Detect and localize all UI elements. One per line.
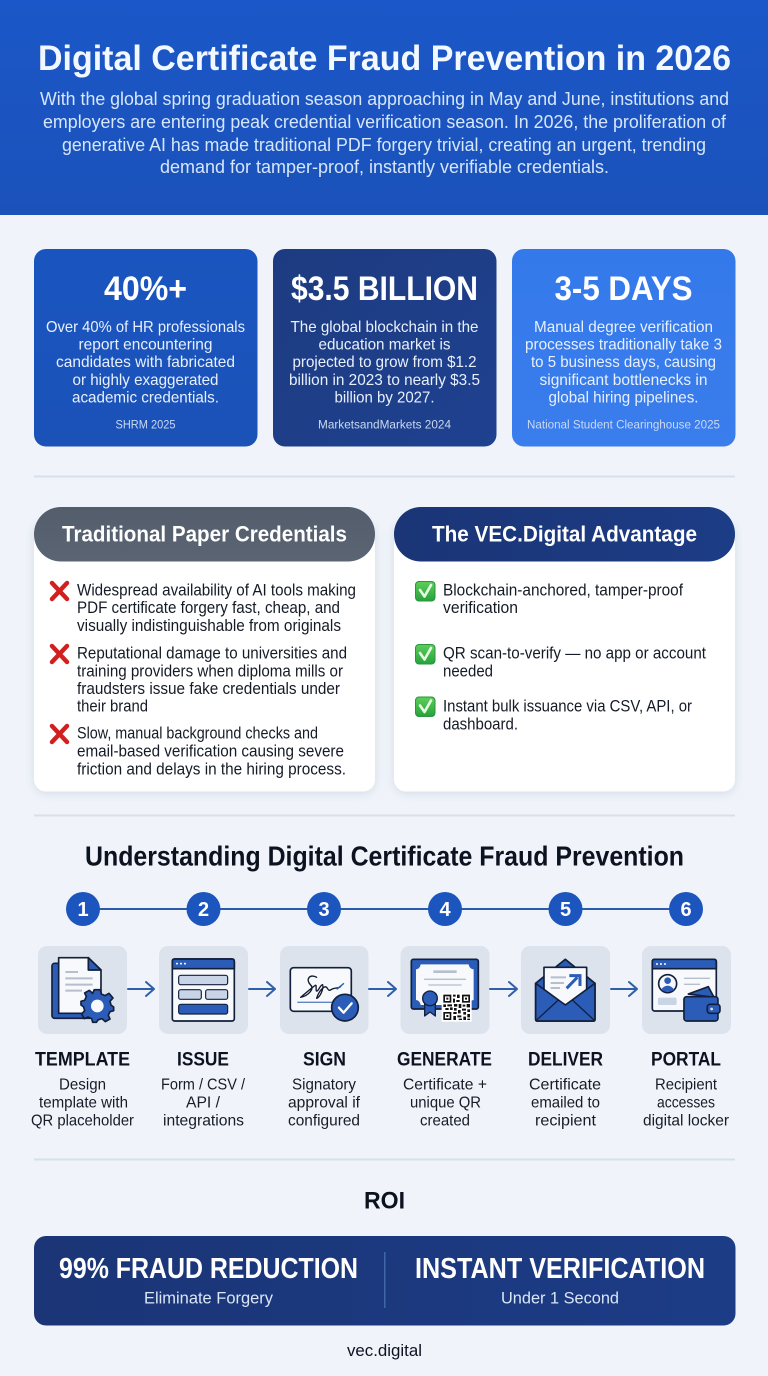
drawback 2: their brand	[77, 698, 148, 716]
stat card: $3.5 billion: $3.5 BILLION	[291, 270, 478, 308]
step label: template	[31, 1048, 134, 1130]
stat card: 40%+: 40%+	[104, 270, 187, 308]
drawback 1: PDF certificate forgery fast, cheap, and	[77, 599, 340, 617]
step label: deliver: DELIVER	[528, 1048, 603, 1070]
step label: template: Design	[59, 1076, 106, 1094]
stat card: $3.5 billion: projected to grow from $1.2	[292, 354, 476, 371]
drawback 2: fraudsters issue fake credentials under	[77, 680, 341, 698]
intro paragraph: demand for tamper-proof, instantly verifiable credentials.	[160, 156, 609, 177]
step label: deliver	[528, 1048, 603, 1130]
step label: sign: Signatory	[292, 1076, 356, 1094]
drawback 3: friction and delays in the hiring process.	[77, 760, 346, 778]
step label: sign: approval if	[288, 1094, 361, 1112]
step number 6: 6	[680, 899, 692, 921]
step label: portal	[643, 1048, 729, 1130]
ROI banner	[34, 1236, 736, 1326]
panel heading: Traditional Paper Credentials	[62, 522, 347, 546]
header banner	[0, 0, 768, 215]
step label: sign	[288, 1048, 361, 1130]
footer URL: vec.digital	[347, 1341, 422, 1360]
step label: portal: accesses	[657, 1094, 715, 1112]
drawback 3: email-based verification causing severe	[77, 742, 344, 760]
step label: portal: digital locker	[643, 1112, 729, 1130]
step label: deliver: recipient	[535, 1112, 597, 1130]
panel heading	[394, 507, 735, 562]
step number 2: 2	[198, 899, 209, 921]
stat card: 3-5 days: Manual degree verification	[534, 319, 713, 336]
icon: green check 3	[416, 697, 435, 716]
stat card: $3.5 billion	[273, 249, 496, 446]
drawback 1	[77, 582, 356, 635]
step number 3	[307, 892, 341, 926]
stat card: 3-5 days: to 5 business days, causing	[531, 354, 716, 371]
title: Digital Certificate Fraud Prevention in 2026	[38, 39, 731, 78]
step label: generate: created	[420, 1112, 470, 1130]
step label: template: QR placeholder	[31, 1112, 134, 1130]
panel: the VEC.Digital advantage	[394, 507, 735, 792]
step label: sign: configured	[288, 1112, 360, 1130]
panel heading: The VEC.Digital Advantage	[432, 522, 697, 546]
step label: generate: Certificate +	[403, 1076, 487, 1094]
step number 1	[66, 892, 100, 926]
step label: portal: PORTAL	[651, 1048, 721, 1070]
icon: envelope delivery	[521, 946, 610, 1034]
icon: green check 2	[416, 644, 435, 664]
benefit 1: verification	[443, 599, 518, 617]
step label: deliver: emailed to	[531, 1094, 600, 1112]
icon: template document with gear	[38, 946, 127, 1034]
benefit 2: QR scan-to-verify — no app or account	[443, 644, 706, 662]
stat card: $3.5 billion: billion by 2027.	[334, 390, 434, 406]
arrow 4 to 5	[490, 982, 517, 996]
drawback 2: training providers when diploma mills or	[77, 662, 344, 680]
panel heading	[34, 507, 375, 562]
stat card: 40%+: candidates with fabricated	[56, 354, 235, 371]
step label: template: template with	[39, 1094, 128, 1112]
intro paragraph: generative AI has made traditional PDF forgery trivial, creating an urgent, trending	[62, 134, 706, 155]
benefit 3: Instant bulk issuance via CSV, API, or	[443, 698, 693, 716]
stat card: $3.5 billion: The global blockchain in the	[290, 319, 479, 336]
arrow 2 to 3	[249, 982, 275, 996]
panel: traditional paper credentials	[34, 507, 375, 792]
timeline numbers	[66, 892, 703, 926]
icon: green check 1	[416, 582, 435, 601]
drawback 1: Widespread availability of AI tools making	[77, 582, 356, 600]
benefit 2	[443, 644, 706, 680]
step number 4	[428, 892, 462, 926]
drawback 2	[77, 644, 347, 716]
intro paragraph	[40, 88, 729, 177]
section heading: ROI: ROI	[364, 1188, 405, 1214]
step label: generate	[397, 1048, 492, 1130]
metric: fraud reduction	[59, 1253, 358, 1308]
metric: fraud reduction: Eliminate Forgery	[144, 1288, 273, 1308]
metric: instant verification: INSTANT VERIFICATION	[415, 1253, 705, 1285]
metric: instant verification	[415, 1253, 705, 1308]
step number 5	[548, 892, 582, 926]
section heading: understanding: Understanding Digital Certificate Fraud Prevention	[85, 840, 684, 872]
drawback 2: Reputational damage to universities and	[77, 644, 347, 662]
stat card: 40%+: SHRM 2025	[116, 418, 176, 432]
benefit 3: dashboard.	[443, 716, 518, 734]
icon: issue form window	[159, 946, 248, 1034]
stat card: 40%+	[34, 249, 258, 446]
intro paragraph: With the global spring graduation season approaching in May and June, institutions and	[40, 88, 729, 109]
benefit 1	[443, 582, 683, 617]
stat card: $3.5 billion: MarketsandMarkets 2024	[318, 418, 451, 432]
stat card: 40%+: or highly exaggerated	[72, 372, 218, 389]
arrow 3 to 4	[369, 982, 396, 996]
intro paragraph: employers are entering peak credential verification season. In 2026, the proliferation of	[43, 111, 727, 132]
drawback 3: Slow, manual background checks and	[77, 724, 318, 742]
stat card: 3-5 days: 3-5 DAYS	[554, 270, 692, 308]
arrow 5 to 6	[611, 982, 637, 996]
benefit 1: Blockchain-anchored, tamper-proof	[443, 582, 683, 600]
stat card: 3-5 days: processes traditionally take 3	[525, 336, 722, 354]
step label: generate: unique QR	[410, 1094, 481, 1112]
step label: issue: Form / CSV /	[161, 1076, 246, 1094]
icon: red cross 3	[52, 726, 67, 742]
stat card: 40%+: academic credentials.	[72, 390, 219, 406]
step label: issue: integrations	[163, 1112, 244, 1130]
stat card: $3.5 billion: education market is	[318, 336, 451, 354]
icon: certificate with QR code	[400, 946, 490, 1034]
step label: sign: SIGN	[303, 1048, 346, 1070]
icon: red cross 1	[52, 583, 67, 599]
benefit 3	[443, 698, 693, 734]
stat card: 3-5 days: National Student Clearinghouse 2025	[527, 418, 720, 432]
stat card: 3-5 days: significant bottlenecks in	[540, 372, 708, 389]
step label: issue: ISSUE	[177, 1048, 229, 1070]
benefit 2: needed	[443, 662, 493, 680]
stat card: 40%+: Over 40% of HR professionals	[46, 319, 245, 336]
metric: fraud reduction: 99% FRAUD REDUCTION	[59, 1253, 358, 1285]
step number 3: 3	[318, 899, 330, 921]
stat card: 3-5 days	[512, 249, 736, 446]
step number 6	[669, 892, 703, 926]
step number 2	[186, 892, 220, 926]
drawback 3	[77, 724, 346, 778]
arrow 1 to 2	[128, 982, 154, 996]
step number 1: 1	[77, 899, 89, 921]
step label: generate: GENERATE	[397, 1048, 492, 1070]
icon: signature with check badge	[280, 946, 368, 1034]
step number 4: 4	[439, 899, 451, 921]
step label: deliver: Certificate	[529, 1076, 601, 1094]
icon: red cross 2	[52, 646, 67, 662]
step label: issue	[161, 1048, 246, 1130]
icon: recipient portal with wallet	[642, 946, 731, 1034]
metric: instant verification: Under 1 Second	[501, 1288, 619, 1308]
step label: portal: Recipient	[655, 1076, 718, 1094]
drawback 1: visually indistinguishable from originals	[77, 617, 341, 635]
step label: template: TEMPLATE	[35, 1048, 130, 1070]
stat card: 40%+: report encountering	[78, 336, 212, 354]
stat card: 3-5 days: global hiring pipelines.	[548, 390, 698, 406]
step label: issue: API /	[186, 1094, 221, 1112]
step number 5: 5	[560, 899, 571, 921]
QR code	[442, 993, 472, 1022]
stat card: $3.5 billion: billion in 2023 to nearly $3.5	[289, 372, 480, 389]
